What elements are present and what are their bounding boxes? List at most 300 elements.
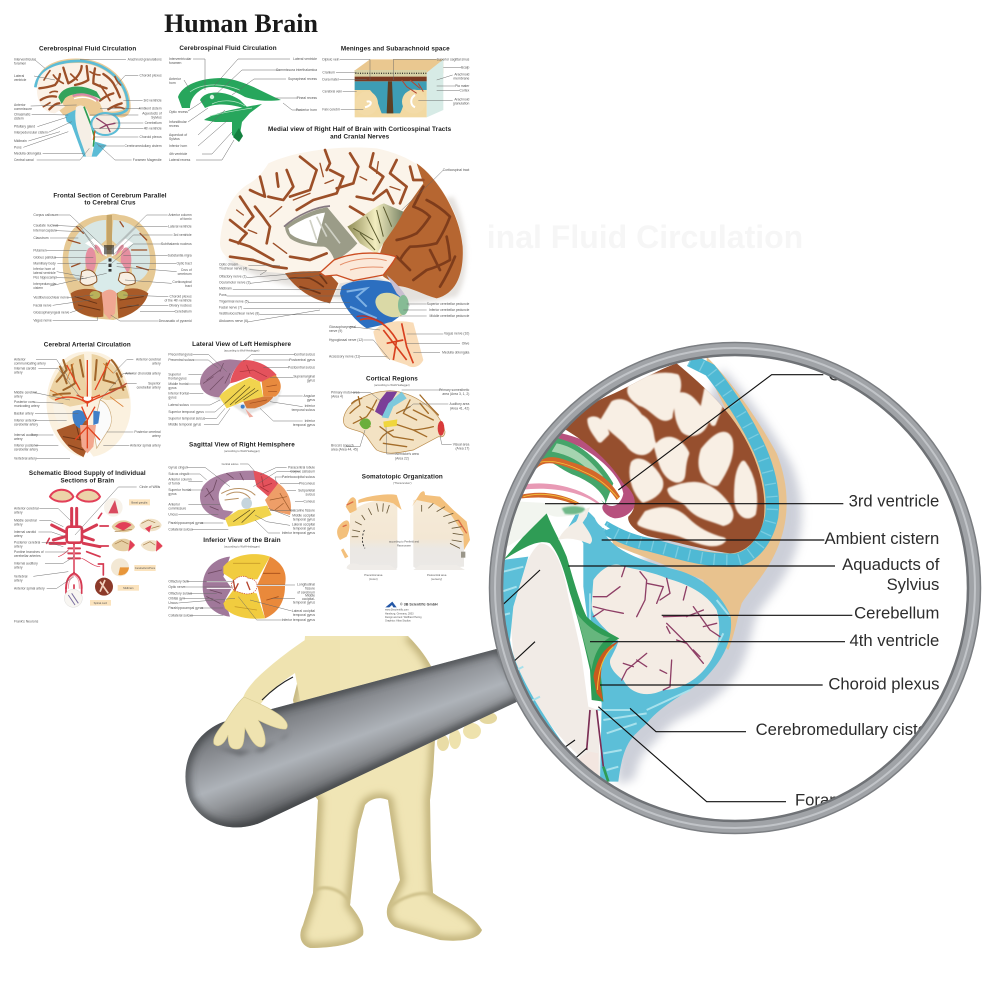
labels and leader lines: Parietooccipital sulcus — [282, 475, 315, 479]
labels and leader lines: Corpus callosum — [290, 470, 315, 474]
labels and leader lines: Crus of — [181, 268, 192, 272]
labels and leader lines — [169, 57, 317, 162]
labels and leader lines: Lateral occipital — [292, 609, 315, 613]
labels and leader lines: of fornix — [180, 217, 192, 221]
illustration: brain thumbnails and section labels: Basal ganglia — [131, 500, 148, 504]
labels and leader lines: Precentral area — [364, 573, 383, 577]
illustration: brain thumbnails and section labels: Midbrain — [123, 586, 134, 590]
labels and leader lines: Anterior spinal artery — [14, 586, 45, 590]
labels and leader lines: Precentral sulcus — [168, 358, 194, 362]
labels and leader lines: Parahippocampal gyrus — [168, 521, 204, 525]
labels and leader lines: Anterior column — [168, 213, 192, 217]
panel: somatotopic organization: ("Homunculus") — [393, 481, 412, 485]
labels and leader lines: Pons — [219, 293, 227, 297]
labels and leader lines: Inferior temporal gyrus — [282, 618, 315, 622]
lens content: enlarged CSF illustration — [503, 358, 940, 806]
lens callout lines: Sylvius — [887, 575, 939, 594]
panel: meninges and subarachnoid space — [322, 45, 470, 117]
labels and leader lines: Cerebellum — [145, 121, 162, 125]
labels and leader lines: Interventricular — [14, 57, 37, 61]
labels and leader lines: Olfactory sulcus — [168, 591, 192, 595]
labels and leader lines: Arachnoid granulations — [128, 57, 162, 61]
labels and leader lines: Posterior com- — [14, 400, 36, 404]
labels and leader lines: frontal gyrus — [168, 376, 187, 380]
labels and leader lines — [322, 57, 470, 111]
labels and leader lines: Inferior horn — [169, 144, 187, 148]
panel: sagittal view of right hemisphere: Sagittal View of Right Hemisphere — [189, 442, 295, 449]
labels and leader lines: horn — [169, 81, 176, 85]
labels and leader lines: Sylvius — [151, 115, 162, 119]
labels and leader lines: Globus pallidus — [33, 255, 56, 259]
labels and leader lines: Pineal recess — [297, 96, 317, 100]
illustration: brain thumbnails and section labels: Cerebellum/Pons — [135, 566, 156, 570]
labels and leader lines: Primary somesthetic — [439, 388, 470, 392]
panel: cortical regions: (according to Wolf-Heidegger) — [374, 383, 410, 387]
labels and leader lines: Middle — [305, 593, 315, 597]
labels and leader lines — [364, 539, 447, 581]
panel: schematic blood supply: Sections of Brain — [60, 477, 114, 484]
labels and leader lines: Midbrain — [219, 287, 232, 291]
logo and imprint: www.3bscientific.com — [385, 609, 409, 612]
labels and leader lines: Inferior posterior — [14, 443, 39, 447]
panel: cerebrospinal fluid circulation ventricles: Cerebrospinal Fluid Circulation — [179, 45, 277, 52]
labels and leader lines — [168, 352, 316, 427]
labels and leader lines: gyrus — [168, 395, 177, 399]
lens callout lines — [490, 366, 942, 809]
labels and leader lines: Vertebral artery — [14, 456, 37, 460]
labels and leader lines: Cerebromedullary cistern — [124, 144, 162, 148]
magnifier handle — [185, 648, 525, 827]
panel: inferior view of the brain — [168, 537, 315, 622]
labels and leader lines: Olfactory bulb — [168, 579, 189, 583]
illustration: meninges block — [355, 59, 443, 117]
illustration: medial brain — [220, 147, 466, 367]
labels and leader lines: Lateral recess — [169, 158, 191, 162]
labels and leader lines: Hypoglossal nerve (12) — [329, 338, 363, 342]
lens callout lines: 4th ventricle — [850, 631, 939, 650]
labels and leader lines: tract — [185, 284, 192, 288]
labels and leader lines: Middle cerebral — [14, 518, 37, 522]
labels and leader lines: Arachnoid — [454, 72, 469, 76]
labels and leader lines: Pontine branches of — [14, 550, 44, 554]
figure: left hand on handle — [214, 697, 290, 756]
labels and leader lines — [168, 462, 315, 535]
labels and leader lines: granulation — [453, 101, 469, 105]
labels and leader lines: nerve (9) — [329, 329, 342, 333]
labels and leader lines: Calcarine fissure — [290, 509, 315, 513]
labels and leader lines: cerebrum — [178, 272, 192, 276]
labels and leader lines: Circle of Willis — [139, 485, 161, 489]
labels and leader lines: Glossopharyngeal — [329, 325, 356, 329]
lens callout lines: Ambient cistern — [825, 529, 939, 548]
labels and leader lines: Internal capsule — [33, 229, 57, 233]
labels and leader lines: Caudate nucleus — [33, 223, 59, 227]
labels and leader lines: Middle occipital — [292, 514, 315, 518]
labels and leader lines: Interventricular — [169, 57, 192, 61]
panel: somatotopic organization: Somatotopic Organization — [362, 473, 443, 480]
labels and leader lines: Collateral sulcus — [168, 613, 193, 617]
panel: medial view of right half of brain — [219, 126, 469, 367]
labels and leader lines: Trigeminal nerve (5) — [219, 299, 249, 303]
labels and leader lines: Medulla oblongata — [14, 152, 41, 156]
labels and leader lines: Lateral sulcus — [168, 403, 189, 407]
labels and leader lines: Optic recess — [169, 110, 188, 114]
labels and leader lines: Inferior — [305, 404, 316, 408]
labels and leader lines: occipital- — [302, 597, 315, 601]
labels and leader lines: Anterior — [14, 103, 27, 107]
labels and leader lines: Postcentral gyrus — [289, 358, 315, 362]
panel: cerebrospinal fluid circulation ventricles — [169, 45, 317, 162]
labels and leader lines: Inferior — [305, 419, 316, 423]
lens callout lines: Choroid plexus — [828, 674, 939, 693]
labels and leader lines: Middle temporal gyrus — [168, 423, 201, 427]
labels and leader lines: 4th ventricle — [144, 126, 162, 130]
labels and leader lines: Pituitary gland — [14, 125, 35, 129]
labels and leader lines: Broca's speech — [331, 443, 354, 447]
labels and leader lines: Facial nerve (7) — [219, 305, 242, 309]
labels and leader lines: cistern — [33, 286, 43, 290]
labels and leader lines: Interpeduncular cistern — [14, 130, 48, 134]
panel: sagittal view of right hemisphere: (according to Wolf-Heidegger) — [224, 449, 260, 453]
labels and leader lines: Posterior horn — [296, 108, 317, 112]
labels and leader lines: Diploic vein — [322, 57, 339, 61]
panel: meninges and subarachnoid space: Meninges and Subarachnoid space — [341, 45, 450, 52]
panel: medial view of right half of brain: Medial view of Right Half of Brain with Corticospinal Tracts — [268, 126, 452, 133]
labels and leader lines: Paracentral lobule — [288, 465, 315, 469]
labels and leader lines: Superior — [168, 372, 182, 376]
labels and leader lines: foramen — [14, 61, 26, 65]
magnifying glass lens — [489, 340, 990, 840]
labels and leader lines: cerebellar artery — [14, 447, 38, 451]
illustration: lateral lobes — [200, 359, 282, 417]
labels and leader lines: Ambient cistern — [139, 106, 162, 110]
panel: cerebrospinal fluid circulation sagittal — [14, 45, 162, 162]
illustration: arterial tree — [47, 508, 108, 593]
labels and leader lines: Superior temporal gyrus — [168, 410, 204, 414]
labels and leader lines: Superior frontal — [168, 488, 191, 492]
labels and leader lines: Sulcus cinguli — [168, 472, 189, 476]
labels and leader lines: Inferior frontal — [168, 391, 189, 395]
labels and leader lines: Middle cerebellar peduncle — [430, 314, 469, 318]
logo and imprint: Hamburg, Germany, 2003 — [385, 612, 414, 615]
labels and leader lines: Superior — [148, 381, 162, 385]
labels and leader lines: Lateral occipital — [292, 522, 315, 526]
labels and leader lines: Pia mater — [455, 84, 470, 88]
labels and leader lines: Superior cerebellar peduncle — [427, 302, 469, 306]
labels and leader lines — [331, 388, 470, 460]
labels and leader lines: Posterior cerebral — [14, 540, 41, 544]
labels and leader lines: artery — [14, 371, 23, 375]
logo and imprint: Graphics: Atlas Studios — [385, 620, 411, 623]
labels and leader lines: temporal sulcus — [292, 408, 315, 412]
logo and imprint: Design and text: Wolfhard Hering — [385, 616, 422, 619]
labels and leader lines: artery — [14, 511, 23, 515]
labels and leader lines: Falx cerebri — [322, 107, 340, 111]
labels and leader lines: Frank's Neurons — [14, 620, 39, 624]
labels and leader lines: Vestibulocochlear nerve (8) — [219, 312, 259, 316]
illustration: homunculus motor and sensory — [337, 491, 470, 570]
labels and leader lines: cerebellar artery — [14, 422, 38, 426]
labels and leader lines: Inferior temporal gyrus — [282, 531, 315, 535]
panel: cortical regions: Cortical Regions — [366, 376, 418, 383]
labels and leader lines: Claustrum — [33, 236, 49, 240]
labels and leader lines: Lateral — [14, 74, 24, 78]
logo and imprint — [385, 602, 438, 623]
labels and leader lines: Facial nerve — [33, 303, 52, 307]
labels and leader lines: Corpus callosum — [33, 213, 58, 217]
labels and leader lines: temporal gyrus — [293, 613, 315, 617]
panel: cerebrospinal fluid circulation sagittal: Cerebrospinal Fluid Circulation — [39, 45, 136, 52]
panel: inferior view of the brain: Inferior View of the Brain — [203, 537, 281, 544]
labels and leader lines: Central sulcus — [222, 462, 239, 466]
labels and leader lines: gyrus — [168, 492, 177, 496]
labels and leader lines: communicating artery — [14, 362, 46, 366]
labels and leader lines: Commissura interthalamica — [276, 68, 317, 72]
icon: logo triangle — [385, 602, 397, 607]
labels and leader lines: gyrus — [307, 398, 315, 402]
labels and leader lines: Olivary nucleus — [169, 304, 192, 308]
labels and leader lines: Wernicke's area — [395, 452, 419, 456]
labels and leader lines: Internal carotid — [14, 367, 36, 371]
labels and leader lines: cerebellar arteries — [14, 554, 41, 558]
illustration: sagittal lobes — [200, 471, 291, 527]
labels and leader lines: Cerebral vein — [322, 89, 342, 93]
labels and leader lines: Orbital gyri — [168, 596, 185, 600]
labels and leader lines: Parahippocampal gyrus — [168, 606, 204, 610]
labels and leader lines: Accessory nerve (11) — [329, 355, 360, 359]
labels and leader lines: Anterior choroidal artery — [125, 371, 161, 375]
labels and leader lines: Posterior cerebral — [134, 430, 161, 434]
labels and leader lines: artery — [14, 437, 23, 441]
labels and leader lines: Anterior column — [168, 477, 192, 481]
labels and leader lines: recess — [169, 124, 179, 128]
labels and leader lines: Anterior cerebral — [14, 507, 39, 511]
labels and leader lines: Optic chiasm — [219, 262, 238, 266]
labels and leader lines: artery — [152, 362, 161, 366]
labels and leader lines: 3rd ventricle — [174, 233, 192, 237]
lens callout lines: Foramen Magendie — [795, 790, 939, 809]
illustration: lateral cortex with regions — [343, 391, 445, 453]
labels and leader lines — [14, 358, 162, 460]
labels and leader lines: Medulla oblongata — [442, 350, 469, 354]
labels and leader lines: temporal gyrus — [293, 526, 315, 530]
panel: frontal section of cerebrum: to Cerebral Crus — [84, 200, 136, 207]
labels and leader lines: artery — [152, 434, 161, 438]
labels and leader lines: Abducens nerve (6) — [219, 319, 248, 323]
labels and leader lines: Decussatio of pyramid — [159, 319, 192, 323]
labels and leader lines: commissure — [14, 107, 32, 111]
labels and leader lines: area (Area 44, 45) — [331, 447, 358, 451]
labels and leader lines: Aqueduct of — [169, 133, 187, 137]
labels and leader lines: artery — [14, 394, 23, 398]
labels and leader lines: Pes hippocampi — [33, 276, 57, 280]
labels and leader lines: fissure — [305, 586, 315, 590]
labels and leader lines: Corticospinal tract — [443, 168, 469, 172]
lens callout lines: Choroid plexus — [828, 366, 939, 385]
lens callout lines: Aquaducts of — [842, 555, 940, 574]
labels and leader lines: Lateral ventricle — [293, 57, 317, 61]
labels and leader lines: Rasmussen — [397, 544, 412, 548]
labels and leader lines: Optic tract — [176, 262, 192, 266]
labels and leader lines: Gyrus cinguli — [168, 465, 188, 469]
labels and leader lines: lateral ventricle — [33, 271, 56, 275]
panel: lateral view of left hemisphere: (according to Wolf-Heidegger) — [224, 348, 259, 352]
labels and leader lines: gyrus — [168, 386, 177, 390]
labels and leader lines: municating artery — [14, 404, 40, 408]
labels and leader lines: Scalp — [461, 65, 469, 69]
panel: cortical regions — [331, 376, 470, 460]
labels and leader lines: artery — [14, 578, 23, 582]
labels and leader lines: Sylvius — [169, 137, 180, 141]
labels and leader lines — [14, 57, 162, 162]
panel: lateral view of left hemisphere — [168, 341, 316, 427]
labels and leader lines: artery — [14, 534, 23, 538]
labels and leader lines: Interpeduncular — [33, 282, 57, 286]
lens ring — [490, 342, 980, 834]
lens callout lines: Cerebellum — [854, 603, 939, 622]
labels and leader lines: Inferior horn of — [33, 267, 55, 271]
labels and leader lines: Superior sagittal sinus — [437, 57, 470, 61]
labels and leader lines: (sensory) — [431, 577, 442, 581]
labels and leader lines: 3rd ventricle — [144, 99, 162, 103]
labels and leader lines: of the 4th ventricle — [164, 299, 192, 303]
labels and leader lines: Anterior — [169, 77, 182, 81]
labels and leader lines: (Area 17) — [455, 446, 469, 450]
labels and leader lines: Foramen Magendie — [133, 158, 162, 162]
labels and leader lines: Basilar artery — [14, 412, 34, 416]
labels and leader lines: Internal carotid — [14, 530, 36, 534]
labels and leader lines: commissure — [168, 506, 186, 510]
illustration: brain thumbnails and section labels: Spinal cord — [94, 601, 107, 605]
labels and leader lines: ventricle — [14, 78, 27, 82]
labels and leader lines: Anterior spinal artery — [130, 444, 161, 448]
labels and leader lines: Optic nerve — [168, 585, 186, 589]
labels and leader lines — [33, 213, 192, 323]
panel: schematic blood supply: Schematic Blood Supply of Individual — [29, 470, 146, 477]
labels and leader lines: Central sulcus — [294, 352, 315, 356]
labels and leader lines: Precuneus — [299, 482, 315, 486]
labels and leader lines: Aqueducts of — [142, 111, 162, 115]
labels and leader lines: Postcentral area — [427, 573, 447, 577]
labels and leader lines: Vagus nerve (10) — [444, 331, 469, 335]
labels and leader lines: Pons — [14, 145, 22, 149]
illustration: sagittal brain with CSF — [35, 59, 131, 157]
labels and leader lines: Substantia nigra — [168, 254, 192, 258]
labels and leader lines: membrane — [453, 76, 469, 80]
labels and leader lines: (Area 22) — [395, 456, 409, 460]
labels and leader lines: Mamillary body — [33, 261, 56, 265]
labels and leader lines: temporal gyrus — [293, 423, 315, 427]
labels and leader lines: Supramarginal — [293, 374, 315, 378]
labels and leader lines: 4th ventricle — [169, 152, 187, 156]
labels and leader lines: Cerebellum — [175, 310, 192, 314]
labels and leader lines: Vertebral — [14, 574, 28, 578]
labels and leader lines: Internal auditory — [14, 433, 38, 437]
panel: cerebral arterial circulation — [14, 342, 162, 460]
panel: medial view of right half of brain: and Cranial Nerves — [330, 134, 390, 141]
labels and leader lines: Middle frontal — [168, 382, 189, 386]
logo and imprint: © 3B Scientific GmbH — [400, 603, 438, 607]
labels and leader lines: Cranium — [322, 70, 335, 74]
labels and leader lines: Suprapineal recess — [288, 77, 317, 81]
labels and leader lines: Dura mater — [322, 77, 340, 81]
labels and leader lines: Vestibulocochlear nerve — [33, 296, 69, 300]
labels and leader lines: temporal gyrus — [293, 601, 315, 605]
labels and leader lines: temporal gyrus — [293, 518, 315, 522]
labels and leader lines: artery — [14, 565, 23, 569]
labels and leader lines: Infundibular — [169, 120, 188, 124]
labels and leader lines: of cerebrum — [297, 590, 315, 594]
labels and leader lines: Visual area — [453, 442, 469, 446]
labels and leader lines: Superior temporal sulcus — [168, 416, 205, 420]
labels and leader lines: Glossopharyngeal nerve — [33, 311, 70, 315]
labels and leader lines — [14, 485, 161, 624]
panel: sagittal view of right hemisphere — [168, 442, 315, 535]
labels and leader lines: Longitudinal — [297, 582, 315, 586]
faint ghost heading: inal Fluid Circulation — [487, 219, 803, 255]
labels and leader lines: Inferior anterior — [14, 418, 37, 422]
labels and leader lines: Choroid plexus — [139, 74, 162, 78]
labels and leader lines: Vagus nerve — [33, 319, 52, 323]
labels and leader lines: Angular — [304, 394, 316, 398]
labels and leader lines: Subthalamic nucleus — [161, 242, 192, 246]
panel: somatotopic organization — [337, 473, 470, 581]
panel: schematic blood supply — [14, 470, 163, 624]
labels and leader lines: sulcus — [306, 492, 315, 496]
title: Human Brain — [164, 9, 318, 38]
labels and leader lines: (motor) — [369, 577, 378, 581]
labels and leader lines: Cortex — [460, 89, 470, 93]
labels and leader lines: Putamen — [33, 249, 47, 253]
labels and leader lines: Trochlear nerve (4) — [219, 267, 247, 271]
labels and leader lines: Inferior cerebellar peduncle — [429, 308, 469, 312]
labels and leader lines: Midbrain — [14, 139, 27, 143]
panel: frontal section of cerebrum — [33, 193, 192, 323]
labels and leader lines: Lateral ventricle — [168, 225, 192, 229]
labels and leader lines: Choroid plexus — [139, 135, 162, 139]
labels and leader lines: Olfactory nerve (1) — [219, 275, 247, 279]
figure: 3D character body — [243, 636, 497, 948]
labels and leader lines: gyrus — [307, 378, 315, 382]
labels and leader lines: Anterior — [14, 358, 27, 362]
illustration: brain thumbnails and section labels — [50, 490, 163, 607]
labels and leader lines: Auditory area — [450, 402, 469, 406]
labels and leader lines: Postcentral sulcus — [288, 365, 315, 369]
labels and leader lines: Oculomotor nerve (3) — [219, 280, 250, 284]
labels and leader lines: (Area 4) — [331, 394, 343, 398]
labels and leader lines: of fornix — [168, 481, 181, 485]
labels and leader lines: Corticospinal — [172, 280, 192, 284]
labels and leader lines: Internal auditory — [14, 561, 38, 565]
illustration: green ventricles — [178, 78, 281, 142]
labels and leader lines: Arachnoid — [454, 97, 469, 101]
labels and leader lines: according to Penfield and — [389, 539, 420, 543]
panel: lateral view of left hemisphere: Lateral View of Left Hemisphere — [192, 341, 292, 348]
labels and leader lines: Subparietal — [298, 488, 315, 492]
labels and leader lines: (Area 41, 42) — [450, 406, 469, 410]
labels and leader lines: Middle cerebral — [14, 390, 37, 394]
labels and leader lines: Uncus — [168, 601, 178, 605]
labels and leader lines: Collateral sulcus — [168, 527, 193, 531]
labels and leader lines: Anterior — [168, 502, 181, 506]
lens callout lines: 3rd ventricle — [849, 492, 939, 511]
labels and leader lines: artery — [14, 522, 23, 526]
panel: cerebral arterial circulation: Cerebral Arterial Circulation — [44, 342, 131, 349]
illustration: inferior lobes — [203, 554, 286, 619]
illustration: inferior brain with arteries — [47, 352, 131, 457]
labels and leader lines: Olive — [462, 341, 469, 345]
lens callout lines: Cerebromedullary cistern — [756, 720, 942, 739]
